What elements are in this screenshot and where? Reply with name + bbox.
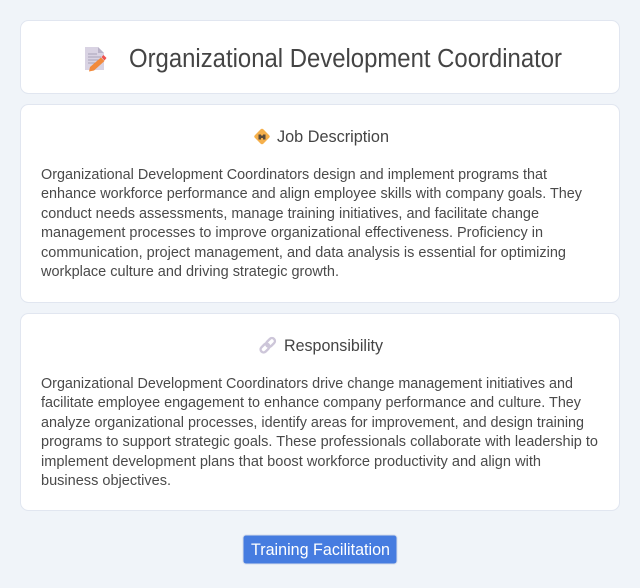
text block: responsibility: Organizational Development Coordinators drive change management initiatives and [41, 376, 573, 392]
text block: job description: Organizational Development Coordinators design and implement programs that [41, 167, 547, 183]
text block: responsibility: implement development plans that boost workforce productivity and align with [41, 454, 541, 470]
panel: job description [20, 104, 620, 302]
text block: job description: workplace culture and driving strategic growth. [40, 264, 339, 280]
text block: job description: communication, project management, and data analysis is essential for optimizing [41, 245, 566, 261]
text block: responsibility: analyze organizational processes, identify areas for improvement, and design training [41, 415, 584, 431]
heading: responsibility: Responsibility [284, 337, 384, 355]
tag button: training facilitation [243, 535, 397, 564]
text block: job description: management processes to improve organizational effectiveness. Proficiency in [41, 225, 543, 241]
text block: responsibility: programs to support strategic goals. These professionals collaborate with leadership to [41, 434, 598, 450]
tag button: training facilitation: Training Facilitation [251, 541, 390, 559]
icon: chain link [259, 337, 276, 354]
text block: responsibility: business objectives. [41, 473, 171, 489]
text block: job description [40, 167, 583, 280]
text block: responsibility: facilitate employee engagement to enhance company performance and culture. They [41, 395, 582, 411]
heading: job description: Job Description [277, 128, 389, 146]
icon: diamond sign [254, 128, 270, 145]
title text: Organizational Development Coordinator [129, 45, 562, 73]
panel: title [20, 20, 620, 94]
panel: responsibility [20, 314, 620, 510]
icon: document with pencil [85, 47, 106, 72]
text block: responsibility [41, 376, 598, 489]
text block: job description: enhance workforce performance and align employee skills with company goals. They [41, 186, 583, 202]
text block: job description: conduct needs assessments, manage training initiatives, and facilitate change [41, 206, 539, 222]
